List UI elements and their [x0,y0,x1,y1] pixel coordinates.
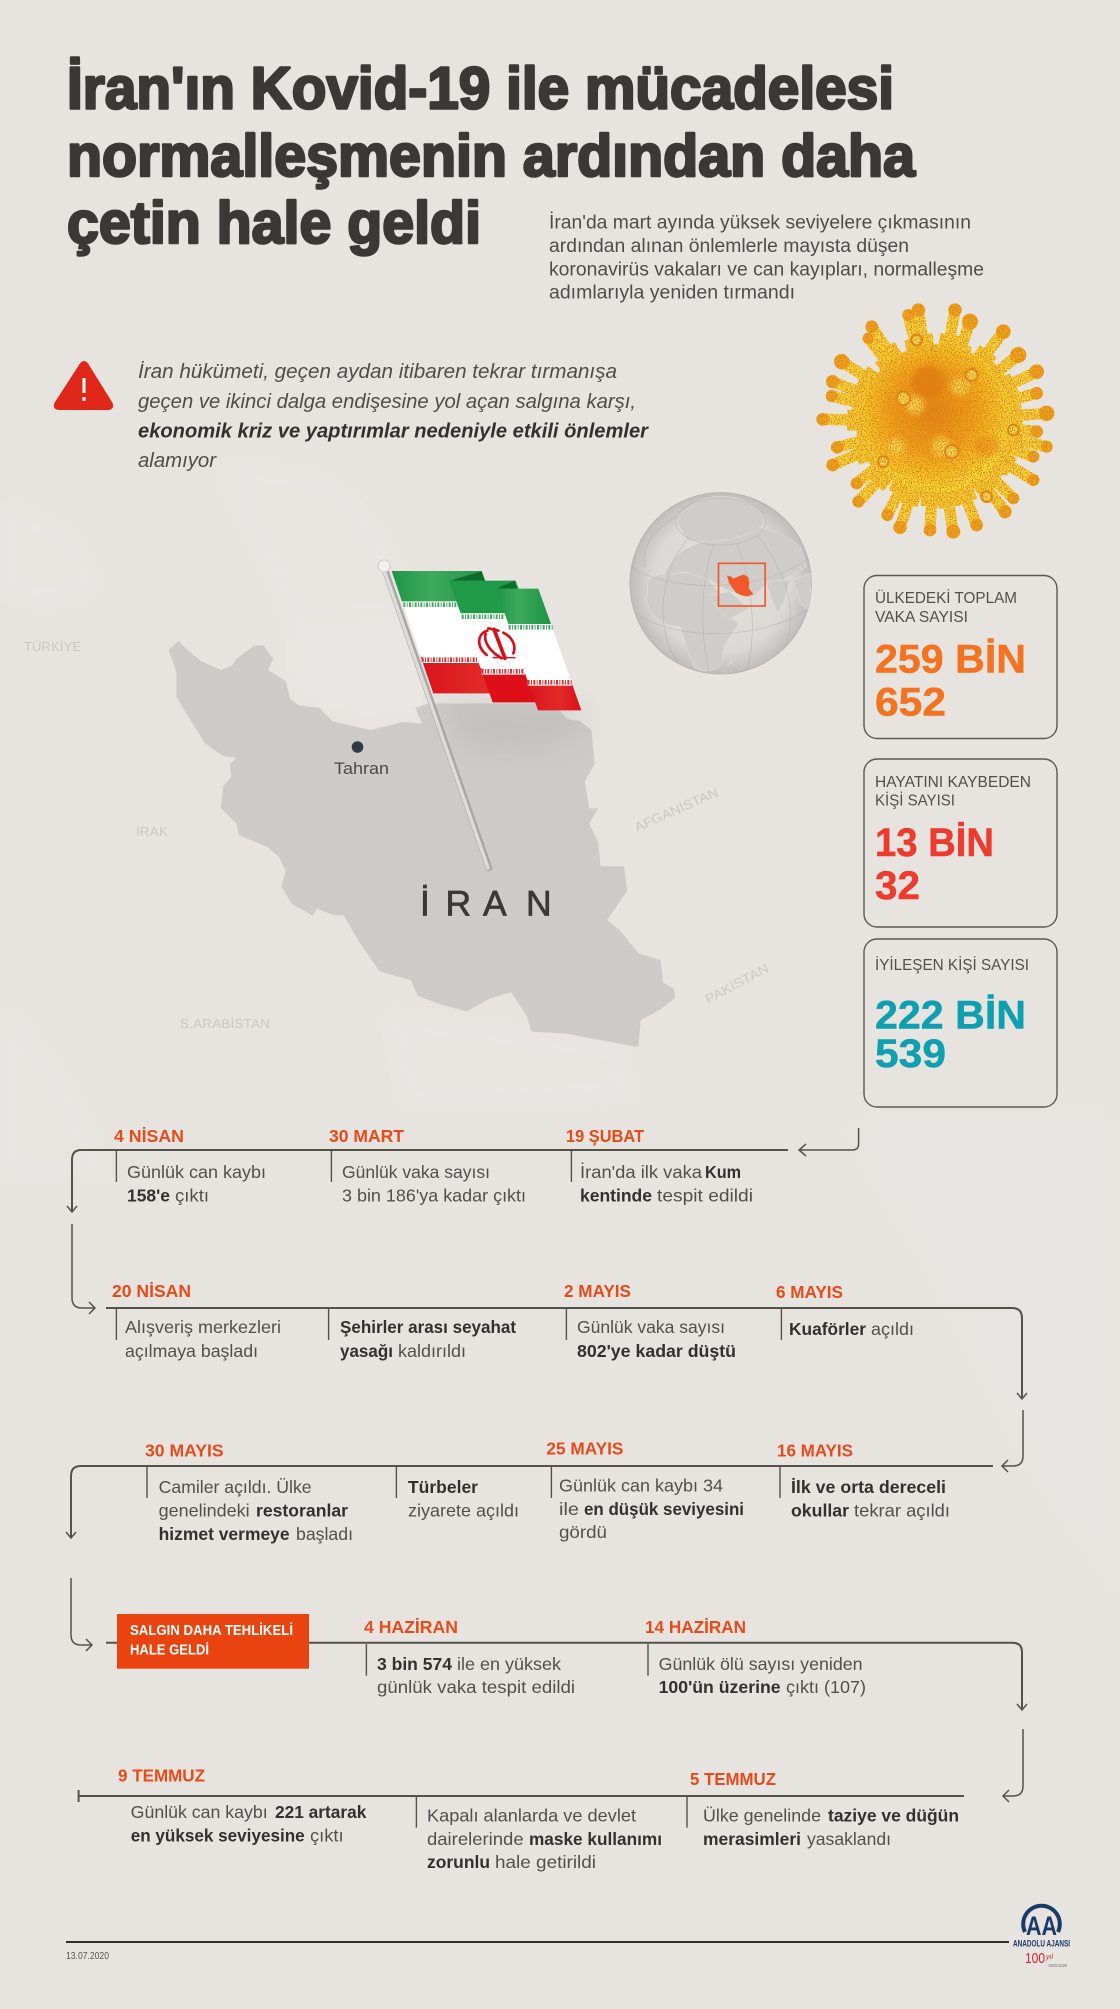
timeline row 4 [71,1578,1027,1710]
icon: coronavirus [816,303,1054,539]
logo: Anadolu Ajansı: AA [1026,1911,1057,1941]
event: 16 Mayıs: tekrar açıldı [854,1500,950,1520]
event: 2 Mayıs: 802'ye kadar düştü [577,1341,736,1361]
event: 30 Mayıs: başladı [296,1524,353,1544]
event: 30 Mayıs: 30 MAYIS [145,1440,224,1460]
stat card: deaths: KİŞİ SAYISI [875,792,955,810]
event: 9 Temmuz: Günlük can kaybı [131,1802,268,1822]
timeline row 1 [67,1126,859,1212]
footer rule and date: 13.07.2020 [66,1950,109,1962]
warning text: alamıyor [138,450,217,472]
event: 5 Temmuz: merasimleri [703,1829,801,1849]
event: 4 Haziran: günlük vaka tespit edildi [377,1677,575,1697]
event: 16 Mayıs [777,1440,950,1520]
event: 4 Nisan [114,1126,266,1206]
title [67,56,916,256]
stat card: recovered: İYİLEŞEN KİŞİ SAYISI [875,956,1029,974]
event: 4 Haziran: 4 HAZİRAN [364,1617,458,1637]
event: 25 Mayıs: ile [559,1499,579,1519]
entry arrow [72,1224,95,1314]
event: 30 Mayıs [145,1440,353,1544]
event: intercity travel: kaldırıldı [398,1341,466,1361]
entry arrow [71,1578,92,1651]
logo: Anadolu Ajansı: 100 [1025,1950,1045,1967]
event: 9 Temmuz: 221 artarak [275,1802,367,1822]
stat card: deaths: HAYATINI KAYBEDEN [875,774,1031,791]
subtitle text [549,212,984,304]
entry arrow [1003,1729,1023,1802]
event: 14 Haziran: 14 HAZİRAN [645,1617,746,1637]
logo: Anadolu Ajansı: ANADOLU AJANSI [1013,1938,1070,1950]
event: 30 Mart: 3 bin 186'ya kadar çıktı [342,1186,526,1206]
event: 19 Şubat: İran'da ilk vaka [580,1162,702,1182]
event: intercity travel: yasağı [340,1341,393,1361]
event: intercity travel: Şehirler arası seyahat [340,1317,516,1337]
event: 6 Mayıs: 6 MAYIS [776,1282,843,1302]
Tehran marker [334,741,389,778]
callout: HALE GELDİ [130,1642,209,1659]
event: 14 Haziran: 100'ün üzerine [659,1677,781,1697]
event: intercity travel [329,1308,516,1361]
event: 19 Şubat: Kum [705,1162,741,1182]
warning text: geçen ve ikinci dalga endişesine yol açan salgına karşı, [138,391,636,413]
event: 25 Mayıs: gördü [559,1522,607,1542]
event: 4 Haziran: 3 bin 574 [377,1654,452,1674]
event: 9 Temmuz [118,1766,367,1846]
event: 16 Mayıs: okullar [791,1500,849,1520]
timeline row 3 [66,1410,1023,1544]
map: country labels: PAKİSTAN [702,961,771,1007]
line with end cap [79,1790,964,1802]
event: 30 Mart: 30 MART [329,1126,404,1146]
icon: globe with Iran locator [630,493,812,675]
map: Iran [169,641,675,1047]
event: shrines [396,1466,519,1520]
warning text [138,361,649,472]
event: 30 Mayıs: restoranlar [256,1500,348,1520]
subtitle text: İran'da mart ayında yüksek seviyelere çıkmasının [549,212,971,234]
event: 20 Nisan: açılmaya başladı [125,1341,258,1361]
event: 2 Mayıs [564,1281,736,1361]
flag emblem [479,628,515,658]
event: 5 Temmuz: Ülke genelinde [703,1806,821,1826]
event: 4 Nisan: Günlük can kaybı [127,1162,266,1182]
event: 5 Temmuz: yasaklandı [807,1829,891,1849]
event: 4 Nisan: çıktı [175,1186,209,1206]
flagpole [378,560,489,868]
event: 16 Mayıs: İlk ve orta dereceli [791,1477,946,1497]
stat card: total cases: VAKA SAYISI [875,609,968,626]
entry arrow [1002,1410,1023,1472]
event: 30 Mayıs: Camiler açıldı. Ülke [159,1477,312,1497]
event: 14 Haziran: Günlük ölü sayısı yeniden [659,1654,863,1674]
stat card: deaths: 13 BİN [875,821,994,865]
logo: Anadolu Ajansı: 1920-2020 [1048,1963,1067,1968]
line and down arrow [106,1308,1022,1399]
event: 19 Şubat: tespit edildi [657,1186,753,1206]
entry arrow [799,1128,859,1156]
event: 19 Şubat: kentinde [580,1186,652,1206]
event: masks: dairelerinde [427,1829,524,1849]
event: 14 Haziran: çıktı (107) [786,1677,866,1697]
event: 14 Haziran [645,1617,866,1697]
stat card: recovered: 222 BİN [875,994,1026,1038]
globe grid [631,498,812,675]
event: 19 Şubat: 19 ŞUBAT [566,1126,644,1146]
line and down arrow [106,1643,1022,1710]
event: 6 Mayıs [776,1282,914,1340]
event: 20 Nisan: 20 NİSAN [112,1281,191,1301]
map: country labels: TÜRKİYE [24,639,81,654]
logo: Anadolu Ajansı: yıl [1045,1954,1053,1961]
flag panel 2 [449,581,559,702]
Tehran marker: Tahran [334,759,389,778]
event: 4 Nisan: 158'e [127,1186,170,1206]
stat card: total cases [864,576,1057,738]
stat card: deaths [864,759,1057,927]
event: 5 Temmuz [687,1769,959,1849]
locator square [718,563,765,606]
stat card: total cases: 652 [875,680,946,724]
Iran on globe [727,575,753,597]
event: 2 Mayıs: Günlük vaka sayısı [577,1317,725,1337]
event: 4 Nisan: 4 NİSAN [114,1126,184,1146]
warning text: İran hükümeti, geçen aydan itibaren tekrar tırmanışa [138,361,617,383]
country name: İRAN [420,884,552,924]
event: masks: Kapalı alanlarda ve devlet [427,1806,636,1826]
event: 30 Mayıs: hizmet vermeye [159,1524,290,1544]
subtitle text: adımlarıyla yeniden tırmandı [549,282,795,304]
event: 30 Mart: Günlük vaka sayısı [342,1162,490,1182]
title: İran'ın Kovid-19 ile mücadelesi [67,56,894,122]
map: country labels: AFGANİSTAN [632,784,720,835]
event: 9 Temmuz: 9 TEMMUZ [118,1766,205,1786]
logo: Anadolu Ajansı [1013,1906,1070,1968]
event: masks: hale getirildi [495,1852,596,1872]
stat card: recovered: 539 [875,1032,946,1076]
event: 6 Mayıs: Kuaförler [789,1319,866,1339]
line and down arrow [71,1466,993,1538]
event: 20 Nisan: Alışveriş merkezleri [125,1317,281,1337]
warning text: ekonomik kriz ve yaptırımlar nedeniyle etkili önlemler [138,420,649,442]
map: country labels [24,639,771,1031]
event: 30 Mayıs: genelindeki [159,1500,250,1520]
title: çetin hale geldi [67,190,481,256]
title: normalleşmenin ardından daha [67,123,916,189]
flag panel 1 [392,571,526,693]
event: 25 Mayıs: Günlük can kaybı 34 [559,1476,723,1496]
stat card: total cases: ÜLKEDEKİ TOPLAM [875,589,1017,607]
event: 19 Şubat [566,1126,753,1206]
event: 9 Temmuz: çıktı [310,1826,344,1846]
event: 5 Temmuz: taziye ve düğün [828,1806,959,1826]
subtitle text: koronavirüs vakaları ve can kayıpları, normalleşme [549,260,984,280]
line and down arrow [72,1150,788,1212]
event: 30 Mart [329,1126,526,1206]
icon: warning triangle [54,361,113,410]
event: masks: zorunlu [427,1852,490,1872]
globe landmasses [647,496,812,671]
event: 5 Temmuz: 5 TEMMUZ [690,1769,776,1789]
map: country labels: IRAK [136,824,168,839]
flag panel 3 [496,589,581,710]
event: 25 Mayıs: en düşük seviyesini [584,1499,744,1519]
event: 16 Mayıs: 16 MAYIS [777,1440,853,1460]
event: 20 Nisan [112,1281,281,1361]
event: 25 Mayıs [546,1438,744,1542]
event: 2 Mayıs: 2 MAYIS [564,1281,631,1301]
event: 4 Haziran: ile en yüksek [457,1654,561,1674]
timeline row 2 [72,1224,1027,1399]
event: 6 Mayıs: açıldı [871,1319,914,1339]
callout: SALGIN DAHA TEHLİKELİ [130,1622,293,1639]
flag shadow [440,695,590,750]
stat card: total cases: 259 BİN [875,638,1026,682]
map: country labels: S.ARABİSTAN [180,1016,270,1031]
subtitle text: ardından alınan önlemlerle mayısta düşen [549,236,909,257]
event: 25 Mayıs: 25 MAYIS [546,1438,623,1458]
Iranian flag [392,571,581,710]
event: shrines: ziyarete açıldı [408,1500,519,1520]
event: masks: maske kullanımı [529,1829,662,1849]
event: 4 Haziran [364,1617,575,1697]
event: 9 Temmuz: en yüksek seviyesine [131,1826,305,1846]
callout [117,1614,309,1669]
event: shrines: Türbeler [408,1477,478,1497]
stat card: deaths: 32 [875,864,920,908]
timeline row 5 [79,1729,1023,1872]
stat card: recovered [864,939,1057,1107]
event: masks [416,1796,662,1872]
